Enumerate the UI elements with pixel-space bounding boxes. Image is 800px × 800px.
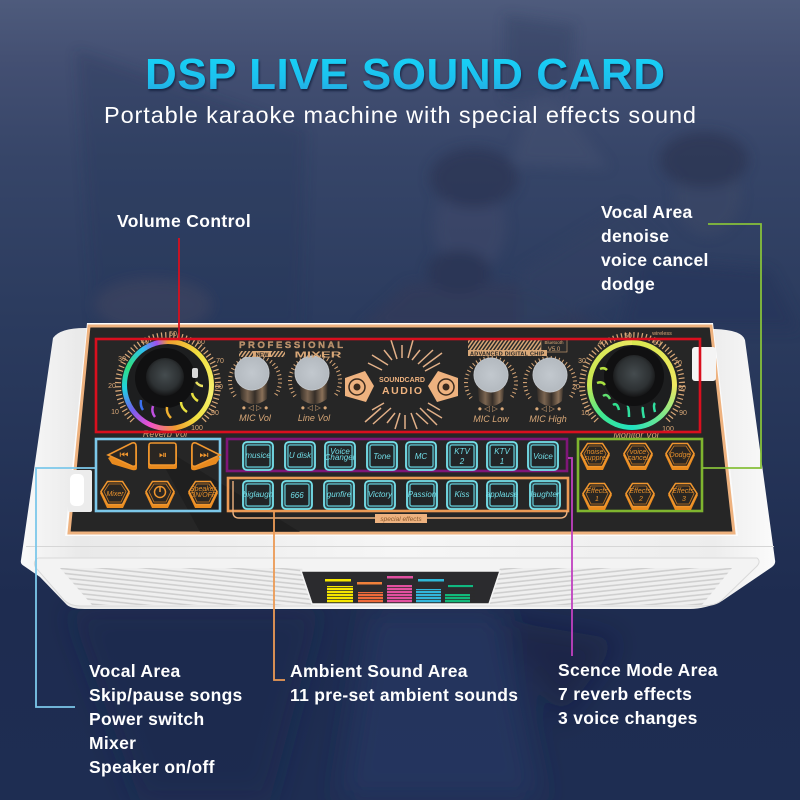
button: next: ⏭: [200, 450, 208, 461]
panel: effect buttons: Effects: [586, 488, 608, 495]
bracket: special effects: [233, 481, 567, 523]
panel: ambient sound keys: Passion: [408, 490, 437, 499]
label: vocal area right: Vocal Area: [601, 202, 693, 222]
monitor knob: 50: [624, 333, 632, 340]
monitor knob: 40: [598, 340, 606, 347]
left side clip: [68, 470, 92, 512]
monitor knob: 80: [678, 385, 686, 392]
panel: effect buttons: Effects: [672, 488, 694, 495]
panel: scene mode keys: KTV: [454, 447, 470, 456]
panel: scene mode keys: U disk: [289, 451, 312, 460]
area box: volume control: [96, 339, 700, 432]
knob: MIC High: [525, 358, 575, 424]
panel: scene mode keys: Voice: [533, 452, 553, 461]
reverb knob: 50: [169, 331, 177, 338]
monitor knob: 10: [581, 410, 589, 417]
badge: advanced digital chip: [468, 339, 567, 358]
button: speaker: [188, 482, 218, 508]
monitor knob: Monitor Vol: [613, 430, 660, 440]
led display: [301, 571, 500, 604]
panel: effect buttons: [578, 439, 702, 511]
knob: MIC Vol: ● ◁ ▷ ●: [242, 403, 268, 412]
monitor knob: 60: [653, 340, 661, 347]
panel: scene mode keys: [227, 439, 567, 471]
label: ambient sound area: Ambient Sound Area: [290, 661, 468, 681]
knob: MIC Vol: [230, 356, 280, 423]
button: power: [145, 482, 175, 508]
panel: transport buttons: [96, 439, 220, 511]
badge: advanced digital chip: V5.0: [548, 347, 561, 353]
reverb knob: 80: [215, 384, 223, 391]
leader: vocal area left: [36, 468, 96, 707]
label: vocal area left: Speaker on/off: [89, 757, 215, 777]
logo: soundcard audio: AUDIO: [382, 385, 422, 397]
panel: ambient sound keys: biglaugh: [243, 490, 274, 499]
label: vocal area left: Skip/pause songs: [89, 685, 243, 705]
panel: ambient sound keys: gunfire: [327, 490, 352, 499]
button: mixer: Mixer: [106, 491, 124, 498]
label: vocal area right: voice cancel: [601, 250, 709, 270]
panel: effect buttons: voice: [630, 449, 646, 456]
leader: scene mode: [568, 458, 572, 656]
panel: effect buttons: cancel: [628, 455, 649, 462]
badge: advanced digital chip: ADVANCED DIGITAL CHIP: [470, 352, 544, 358]
knob: MIC High: MIC High: [529, 414, 567, 424]
logo: soundcard audio: [345, 340, 458, 429]
panel: effect buttons: 2: [638, 496, 643, 503]
panel: effect buttons: 1: [595, 496, 599, 503]
reverb knob: [108, 331, 224, 439]
reverb knob: 70: [216, 358, 224, 365]
right side clip: [692, 347, 716, 381]
button: previous: ⏮: [120, 450, 128, 461]
control panel: [69, 326, 734, 533]
reverb knob: 90: [211, 410, 219, 417]
panel: ambient sound keys: laughter: [531, 490, 560, 499]
panel: effect buttons: Effects: [629, 488, 651, 495]
monitor knob: 100: [662, 426, 674, 433]
title: DSP LIVE SOUND CARD: [145, 50, 665, 99]
monitor knob: [572, 333, 687, 440]
label: scene mode area: 3 voice changes: [558, 708, 698, 728]
reverb knob: 30: [118, 356, 126, 363]
reverb knob: 20: [108, 383, 116, 390]
panel: ambient sound keys: [228, 478, 568, 511]
monitor knob: 20: [572, 384, 580, 391]
knob: Line Vol: Line Vol: [298, 413, 331, 423]
logo: professional mixer: PROFESSIONAL: [239, 340, 343, 351]
subtitle: Portable karaoke machine with special effects sound: [104, 102, 696, 128]
panel: scene mode keys: Tone: [373, 452, 391, 461]
label: vocal area right: denoise: [601, 226, 669, 246]
knob: MIC Low: [466, 358, 516, 424]
label: vocal area left: Power switch: [89, 709, 204, 729]
reverb knob: Reverb Vol: [143, 429, 188, 439]
monitor knob: 70: [674, 360, 682, 367]
leader: volume control: [178, 238, 180, 338]
knob: Line Vol: ● ◁ ▷ ●: [301, 403, 327, 412]
panel: scene mode keys: musice: [245, 451, 271, 460]
knob: MIC High: ● ◁ ▷ ●: [535, 404, 561, 413]
panel: scene mode keys: Voice: [330, 447, 350, 456]
knob: MIC Low: ● ◁ ▷ ●: [478, 404, 504, 413]
monitor knob: 90: [679, 410, 687, 417]
panel: ambient sound keys: Kiss: [454, 490, 470, 499]
badge: advanced digital chip: Bluetooth: [544, 340, 564, 345]
reverb knob: 10: [111, 409, 119, 416]
logo: professional mixer: MIXER: [294, 350, 342, 360]
label: scene mode area: Scence Mode Area: [558, 660, 718, 680]
label: ambient sound area: 11 pre-set ambient sounds: [290, 685, 518, 705]
label: vocal area right: dodge: [601, 274, 655, 294]
label: vocal area left: Vocal Area: [89, 661, 181, 681]
label: volume control: Volume Control: [117, 211, 251, 231]
reverb knob: 60: [197, 339, 205, 346]
panel: scene mode keys: 2: [459, 457, 465, 466]
panel: ambient sound keys: 666: [290, 491, 304, 500]
logo: professional mixer: NEW: [256, 352, 269, 358]
panel: scene mode keys: 1: [500, 457, 504, 466]
knob: MIC Vol: MIC Vol: [239, 413, 272, 423]
logo: soundcard audio: SOUNDCARD: [379, 375, 426, 384]
panel: ambient sound keys: applause: [486, 490, 519, 499]
panel: effect buttons: Dodge: [670, 452, 690, 459]
panel: effect buttons: suppre: [584, 455, 606, 462]
panel: scene mode keys: Changer: [325, 453, 356, 462]
reverb knob: 100: [191, 425, 203, 432]
leader: ambient sound: [274, 511, 285, 680]
button: play pause: ⏯: [159, 450, 167, 461]
knob: MIC Low: MIC Low: [473, 414, 509, 424]
button: speaker: ON/OFF: [190, 492, 217, 499]
logo: professional mixer: [239, 340, 343, 360]
bracket: special effects: special effects: [380, 516, 422, 523]
label: vocal area left: Mixer: [89, 733, 136, 753]
wireless mark: wireless: [651, 331, 672, 337]
panel: effect buttons: 3: [682, 496, 686, 503]
panel: ambient sound keys: Victory: [368, 490, 393, 499]
reverb knob: 40: [141, 339, 149, 346]
panel: effect buttons: noise: [587, 449, 603, 456]
panel: scene mode keys: MC: [415, 452, 427, 461]
panel: scene mode keys: KTV: [494, 447, 510, 456]
monitor knob: 30: [578, 358, 586, 365]
leader: vocal area right: [702, 224, 761, 468]
knob: Line Vol: [290, 356, 340, 423]
device body: [21, 323, 775, 609]
label: scene mode area: 7 reverb effects: [558, 684, 692, 704]
button: speaker: Speaker: [190, 486, 217, 493]
